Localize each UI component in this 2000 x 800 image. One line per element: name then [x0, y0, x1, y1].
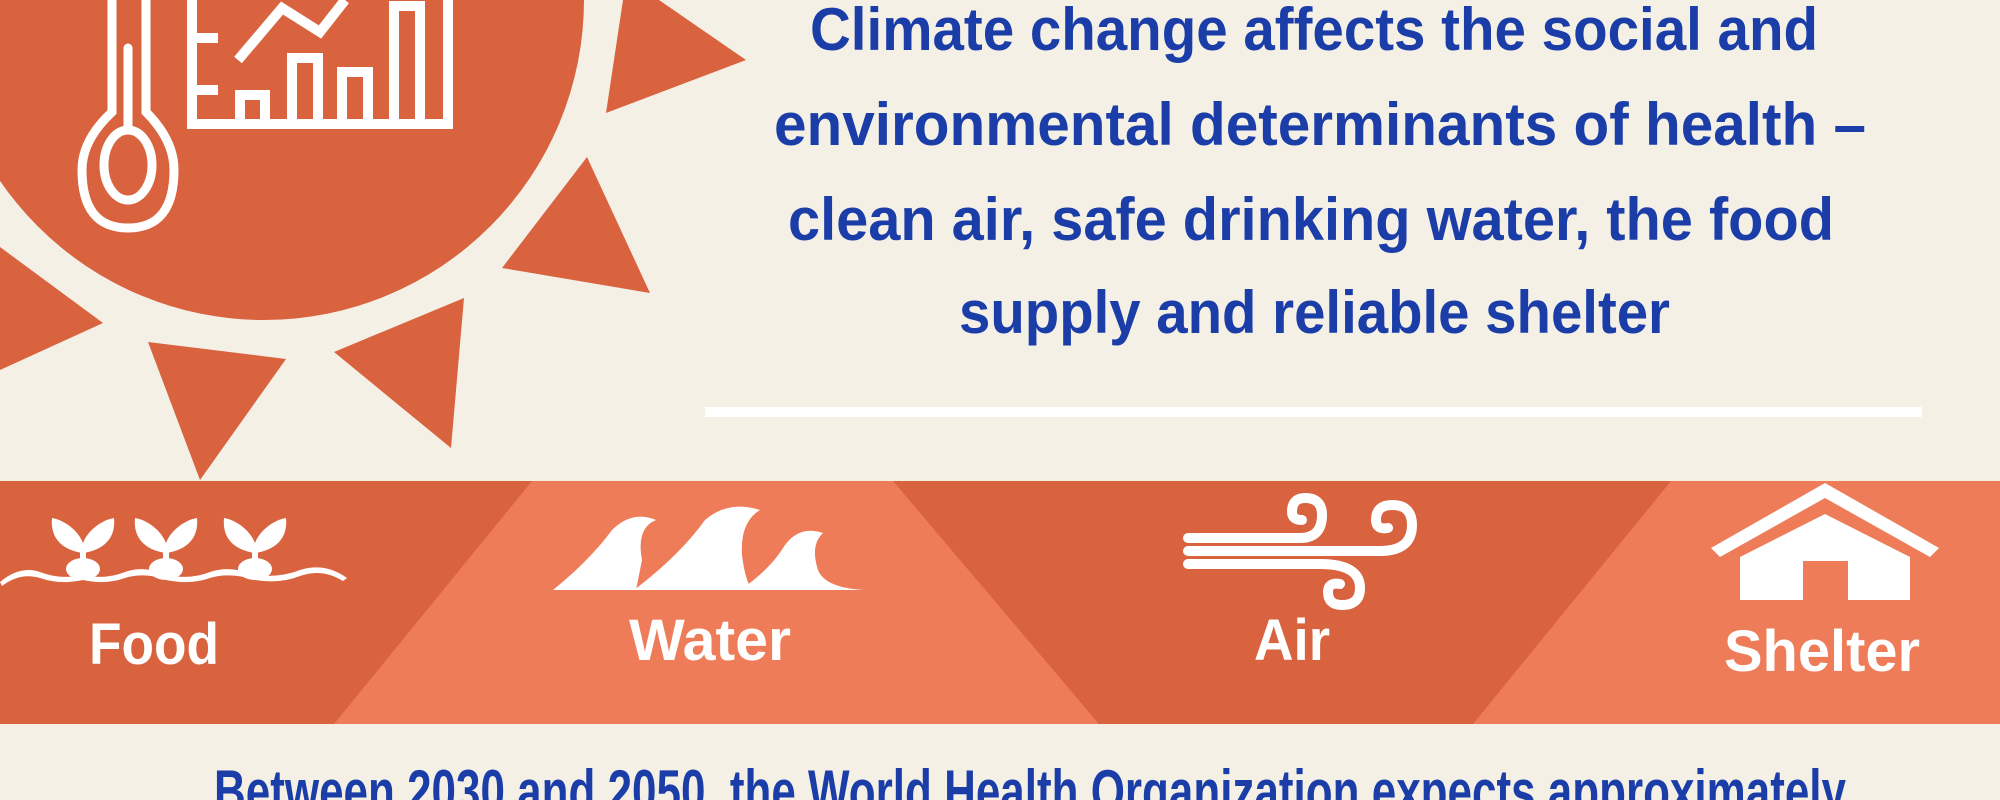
icon: waves [553, 507, 865, 590]
headline text: supply and reliable shelter [959, 279, 1670, 346]
headline text: environmental determinants of health – [774, 91, 1866, 158]
headline text: clean air, safe drinking water, the food [788, 186, 1834, 253]
label: Shelter: Shelter [1724, 619, 1920, 684]
headline text [774, 0, 1866, 346]
sun circle [0, 0, 584, 320]
label: Food: Food [89, 612, 219, 677]
icon: thermometer [82, 0, 174, 228]
sun illustration [0, 0, 746, 480]
icon: wind [1188, 498, 1412, 605]
label: Water: Water [629, 608, 791, 673]
icon: chart [192, 0, 448, 124]
icon: food sprouts [0, 518, 347, 586]
icon: house [1711, 483, 1939, 600]
sun rays [0, 0, 746, 480]
determinants band [0, 481, 2000, 724]
label: Air: Air [1254, 608, 1330, 673]
